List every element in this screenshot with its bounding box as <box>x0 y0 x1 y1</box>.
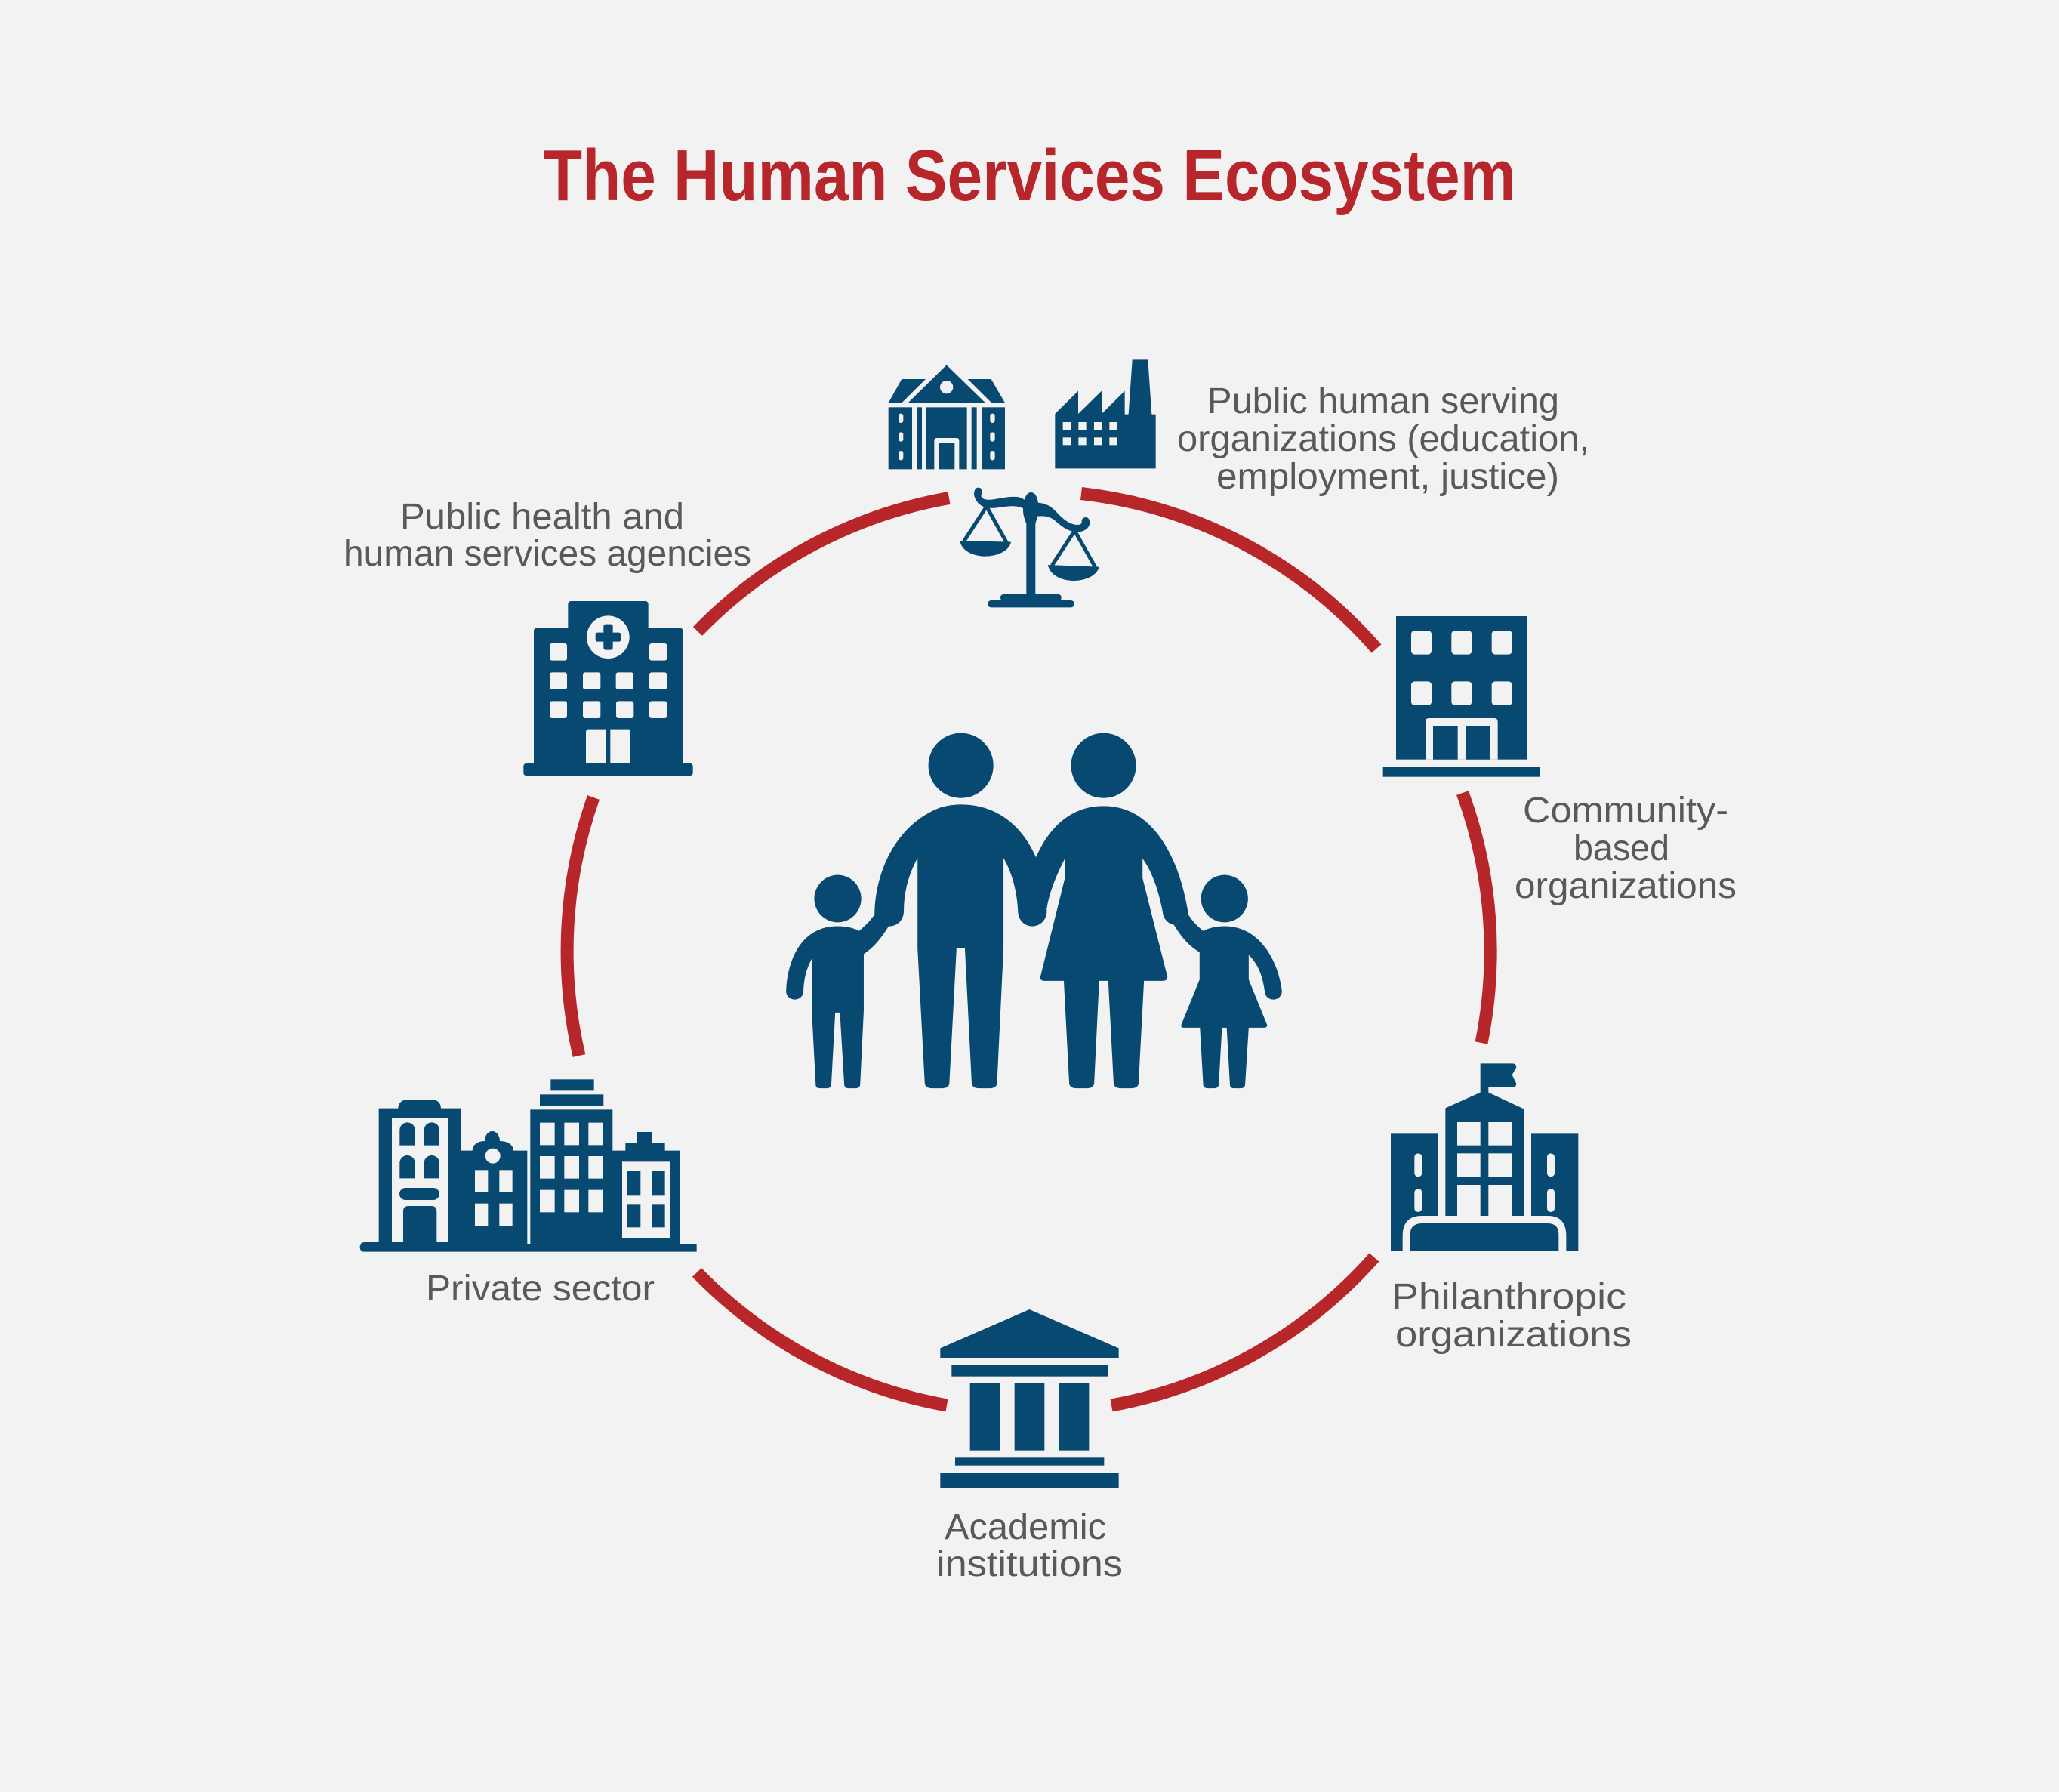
label: public human serving organizations: employment, justice) <box>1216 457 1559 497</box>
label: public human serving organizations <box>1177 381 1589 497</box>
label: community-based organizations: organizations <box>1515 866 1737 906</box>
icon: hospital <box>523 601 693 776</box>
label: public health and human services agencies <box>344 497 751 574</box>
boy <box>786 875 889 1088</box>
title: The Human Services Ecosystem <box>544 135 1516 216</box>
label: philanthropic organizations: organizations <box>1395 1315 1632 1355</box>
girl <box>1174 875 1282 1088</box>
man <box>874 733 1046 1088</box>
icon: academic institution <box>940 1309 1119 1488</box>
ring of red arc segments <box>567 494 1490 1405</box>
label: academic institutions: Academic <box>945 1507 1106 1547</box>
label: community-based organizations: based <box>1574 828 1669 868</box>
label: community-based organizations <box>1515 791 1737 906</box>
label: academic institutions <box>936 1507 1123 1584</box>
icon: government building <box>889 365 1005 469</box>
icon: scales of justice <box>960 488 1099 607</box>
label: public health and human services agencies: human services agencies <box>344 534 751 574</box>
label: community-based organizations: Community- <box>1523 791 1728 831</box>
woman <box>1030 733 1188 1088</box>
label: public human serving organizations: Public human serving <box>1207 381 1559 421</box>
icon: community organization building <box>1383 616 1540 777</box>
label: philanthropic organizations: Philanthropic <box>1392 1277 1626 1317</box>
label: public human serving organizations: organizations (education, <box>1177 419 1589 459</box>
label: private sector: Private sector <box>426 1269 655 1309</box>
label: academic institutions: institutions <box>936 1544 1123 1584</box>
label: public health and human services agencies: Public health and <box>400 497 684 537</box>
icon: family holding hands <box>786 733 1282 1088</box>
label: philanthropic organizations <box>1392 1277 1632 1355</box>
icon: private sector city buildings <box>360 1079 697 1252</box>
icon: philanthropic organization building <box>1391 1063 1578 1251</box>
icon: factory <box>1055 359 1156 468</box>
